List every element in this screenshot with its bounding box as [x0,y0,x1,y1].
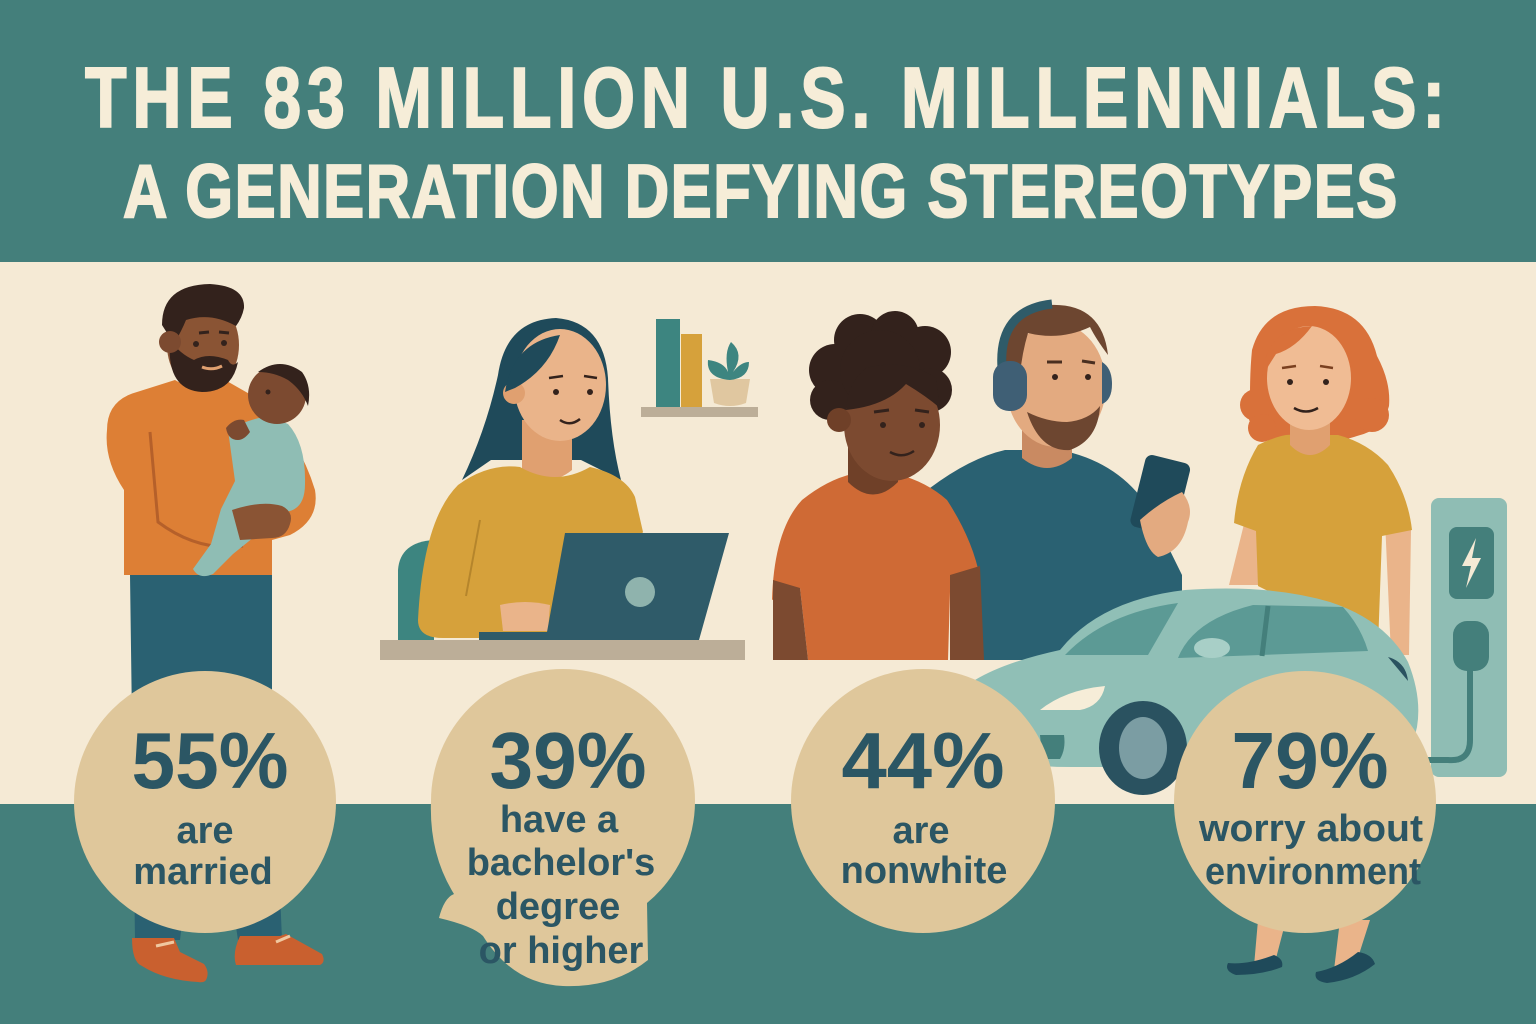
stat circle: 44% nonwhite: are [892,810,950,852]
stat circle: 79% environment: 79% [1232,716,1388,805]
stat circle: 39% bachelor's degree [431,669,695,986]
figure: man with headphones and phone [930,304,1192,660]
stat circle: 55% married: married [133,851,273,893]
stat circle: 39% bachelor's degree: or higher [479,930,644,972]
figure: lower legs and flats of woman [1227,920,1375,983]
title banner [0,0,1536,262]
bottom teal band [0,804,1536,1024]
stat circle: 79% environment [1174,671,1436,933]
stat circle: 55% married: are [176,810,234,852]
stat circle: 79% environment: worry about [1198,808,1423,850]
stat circle: 44% nonwhite: 44% [842,716,1004,805]
stat circle: 55% married [74,671,336,933]
stat circle: 55% married: 55% [132,716,288,805]
stat circle: 39% bachelor's degree: have a [500,799,619,841]
figure: person with curly hair [772,311,984,660]
title banner: A GENERATION DEFYING STEREOTYPES [123,149,1397,233]
title banner: THE 83 MILLION U.S. MILLENNIALS: [85,51,1445,146]
icon: electric car [975,588,1418,795]
stat circle: 39% bachelor's degree: 39% [490,716,646,805]
figure: father holding baby [107,284,324,982]
figure: woman with red hair [1229,306,1412,655]
stat circle: 79% environment: environment [1205,851,1421,893]
stat circle: 39% bachelor's degree: degree [496,886,620,928]
figure: woman with laptop [380,318,745,660]
stat circle: 44% nonwhite [791,669,1055,933]
icon: EV charger station [1418,498,1507,777]
icon: bookshelf with books and plant [641,319,758,417]
stat circle: 39% bachelor's degree: bachelor's [467,842,655,884]
stat circle: 44% nonwhite: nonwhite [841,850,1007,892]
